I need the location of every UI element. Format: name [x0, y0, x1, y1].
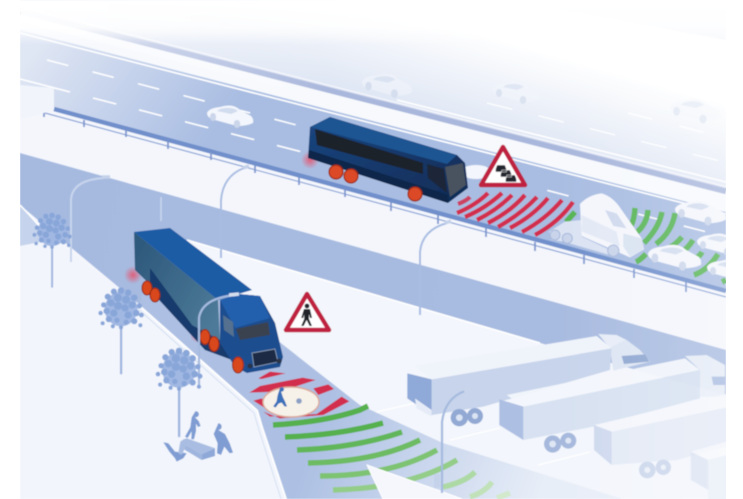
lower left ground [20, 240, 287, 499]
white median [66, 32, 626, 178]
lamp in parking area [434, 388, 471, 493]
background ground [20, 72, 726, 348]
parked truck 1 [407, 334, 650, 426]
semi truck [124, 228, 283, 373]
trailer side [134, 232, 220, 340]
cab side window [223, 315, 234, 337]
bus door window [427, 164, 447, 193]
seated person [214, 423, 233, 455]
parked truck 3 [594, 394, 727, 478]
fade overlay: upper left [20, 0, 330, 100]
parking and service area [186, 238, 633, 412]
lamp in front of semi [199, 294, 239, 388]
pedestrian highlight with child and ball [263, 387, 319, 417]
warning sign: traffic jam [481, 147, 525, 185]
overpass block [20, 85, 54, 114]
wheels [550, 230, 619, 256]
bus lower skirt [308, 150, 448, 203]
trailer wheels [142, 281, 219, 352]
radar: red warning zone ahead of bus [457, 193, 573, 235]
people and picnic bench [163, 411, 233, 462]
cab [580, 193, 644, 257]
slip road [141, 304, 618, 499]
cars in traffic queue [648, 202, 726, 278]
curb [140, 305, 287, 499]
near guard rail [44, 109, 726, 297]
parked truck 4 [691, 442, 727, 499]
front wheel [232, 357, 244, 373]
upper carriageway [20, 0, 726, 186]
trailer roof [134, 228, 252, 300]
chassis [549, 220, 610, 255]
table [180, 438, 215, 454]
bus side windows [315, 129, 423, 174]
left bench [163, 442, 187, 462]
tree lower [156, 348, 203, 437]
warning sign: pedestrian [286, 294, 329, 330]
bus wheels [329, 165, 422, 201]
tree left [32, 213, 72, 288]
lane divider triangle [367, 465, 462, 499]
windscreen [236, 322, 270, 340]
bus windscreen [445, 163, 466, 197]
grille [252, 349, 278, 367]
bus body [308, 117, 468, 203]
white tractor truck [549, 193, 644, 257]
bending person [178, 439, 188, 455]
street lamps [71, 166, 451, 315]
fade overlay: top [20, 0, 726, 45]
radar: green safe zone behind pedestrian [273, 406, 510, 498]
main carriageway [20, 30, 726, 292]
side road [20, 153, 726, 415]
standing person [185, 411, 201, 439]
cab roof [220, 294, 270, 328]
bus roof [310, 117, 457, 164]
cab [220, 294, 283, 373]
child figure [273, 387, 287, 408]
fade overlay: right [560, 0, 726, 499]
coach bus [301, 117, 468, 203]
left verge [20, 206, 40, 246]
radar: red warning zone ahead of semi truck [249, 372, 349, 418]
tree middle [98, 287, 144, 374]
upper guard rail [20, 8, 726, 191]
parked truck 2 [499, 355, 725, 453]
radar: green safe zone around white truck [566, 208, 726, 282]
ball [296, 398, 302, 404]
